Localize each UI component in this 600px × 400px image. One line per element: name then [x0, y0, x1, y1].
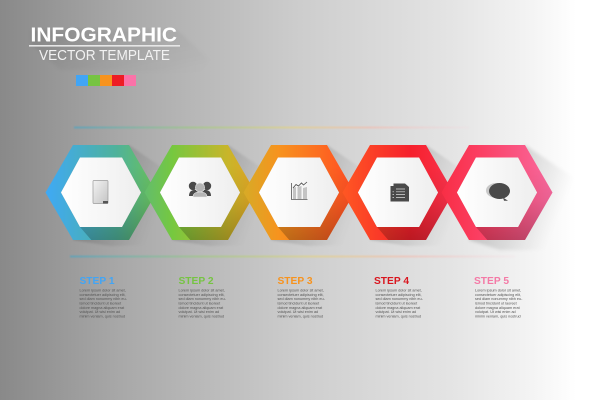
step 2 text: Lorem ipsum dolor sit amet,: [178, 288, 225, 292]
step 5 text: STEP 5: [474, 275, 509, 287]
upper gradient rule: [74, 126, 469, 128]
step 2 text: sed diam nonummy nibh eu-: [178, 297, 227, 301]
lower gradient rule: [70, 256, 515, 258]
icon: people: [189, 182, 211, 197]
colour swatches: [76, 75, 136, 86]
step 2 text: volutpat. Ut wisi enim ad: [178, 310, 219, 314]
step 1 text: ismod tincidunt ut laoreet: [80, 302, 122, 306]
step 4 text: minim veniam, quis nostrud: [376, 314, 421, 318]
step 5 text: [474, 275, 523, 318]
step 1 text: sed diam nonummy nibh eu-: [80, 297, 128, 301]
icon: documents: [390, 184, 409, 202]
step 2 text: consectetuer adipiscing elit,: [178, 293, 225, 297]
step 3 text: ismod tincidunt ut laoreet: [278, 302, 320, 306]
step 4 text: volutpat. Ut wisi enim ad: [376, 310, 416, 314]
icon: line chart: [292, 182, 308, 200]
step 1 text: STEP 1: [80, 275, 115, 287]
icon: speech bubbles: [486, 183, 510, 201]
step 1 text: volutpat. Ut wisi enim ad: [80, 310, 120, 314]
step 2 text: [178, 275, 227, 318]
step 1 text: minim veniam, quis nostrud: [80, 314, 125, 318]
step 4 text: [374, 275, 424, 318]
step 5 text: ismod tincidunt ut laoreet: [475, 302, 518, 306]
step 4 text: ismod tincidunt ut laoreet: [376, 302, 418, 306]
step 5 text: volutpat. Ut wisi enim ad: [475, 310, 516, 314]
step 3 text: Lorem ipsum dolor sit amet,: [278, 288, 324, 292]
step 1 text: dolore magna aliquam erat: [80, 306, 125, 310]
step 4 hexagon: [342, 145, 456, 246]
step 2 hexagon: [145, 145, 255, 246]
step 5 hexagon: [442, 145, 560, 250]
step 2 text: minim veniam, quis nostrud: [178, 314, 224, 318]
step 3 text: [278, 275, 326, 318]
step 1 text: [80, 275, 128, 318]
step 3 text: dolore magna aliquam erat: [278, 306, 323, 310]
subtitle: VECTOR TEMPLATE: VECTOR TEMPLATE: [39, 48, 170, 64]
title block: [29, 24, 210, 72]
step 5 text: consectetuer adipiscing elit,: [475, 293, 521, 297]
step 4 text: consectetuer adipiscing elit,: [376, 293, 422, 297]
step 5 text: sed diam nonummy nibh eu-: [475, 297, 523, 301]
step 3 hexagon: [244, 145, 356, 246]
step 2 text: ismod tincidunt ut laoreet: [178, 302, 221, 306]
step 3 text: consectetuer adipiscing elit,: [278, 293, 324, 297]
title: INFOGRAPHIC: INFOGRAPHIC: [30, 24, 177, 46]
step 4 text: STEP 4: [374, 275, 409, 287]
step 5 text: minim veniam, quis nostrud: [475, 314, 521, 318]
step 2 text: dolore magna aliquam erat: [178, 306, 224, 310]
step 4 text: Lorem ipsum dolor sit amet,: [376, 288, 422, 292]
step 3 text: volutpat. Ut wisi enim ad: [278, 310, 318, 314]
step 4 text: sed diam nonummy nibh eu-: [376, 297, 424, 301]
step 2 text: STEP 2: [178, 275, 214, 287]
step 5 text: Lorem ipsum dolor sit amet,: [475, 288, 521, 292]
step 1 text: Lorem ipsum dolor sit amet,: [80, 288, 126, 292]
icon: tablet: [93, 180, 108, 204]
step 5 text: dolore magna aliquam erat: [475, 306, 521, 310]
step 3 text: minim veniam, quis nostrud: [278, 314, 323, 318]
step 1 text: consectetuer adipiscing elit,: [80, 293, 126, 297]
step 3 text: sed diam nonummy nibh eu-: [278, 297, 326, 301]
step 3 text: STEP 3: [278, 275, 313, 287]
step 1 hexagon: [46, 145, 155, 246]
step 4 text: dolore magna aliquam erat: [376, 306, 421, 310]
